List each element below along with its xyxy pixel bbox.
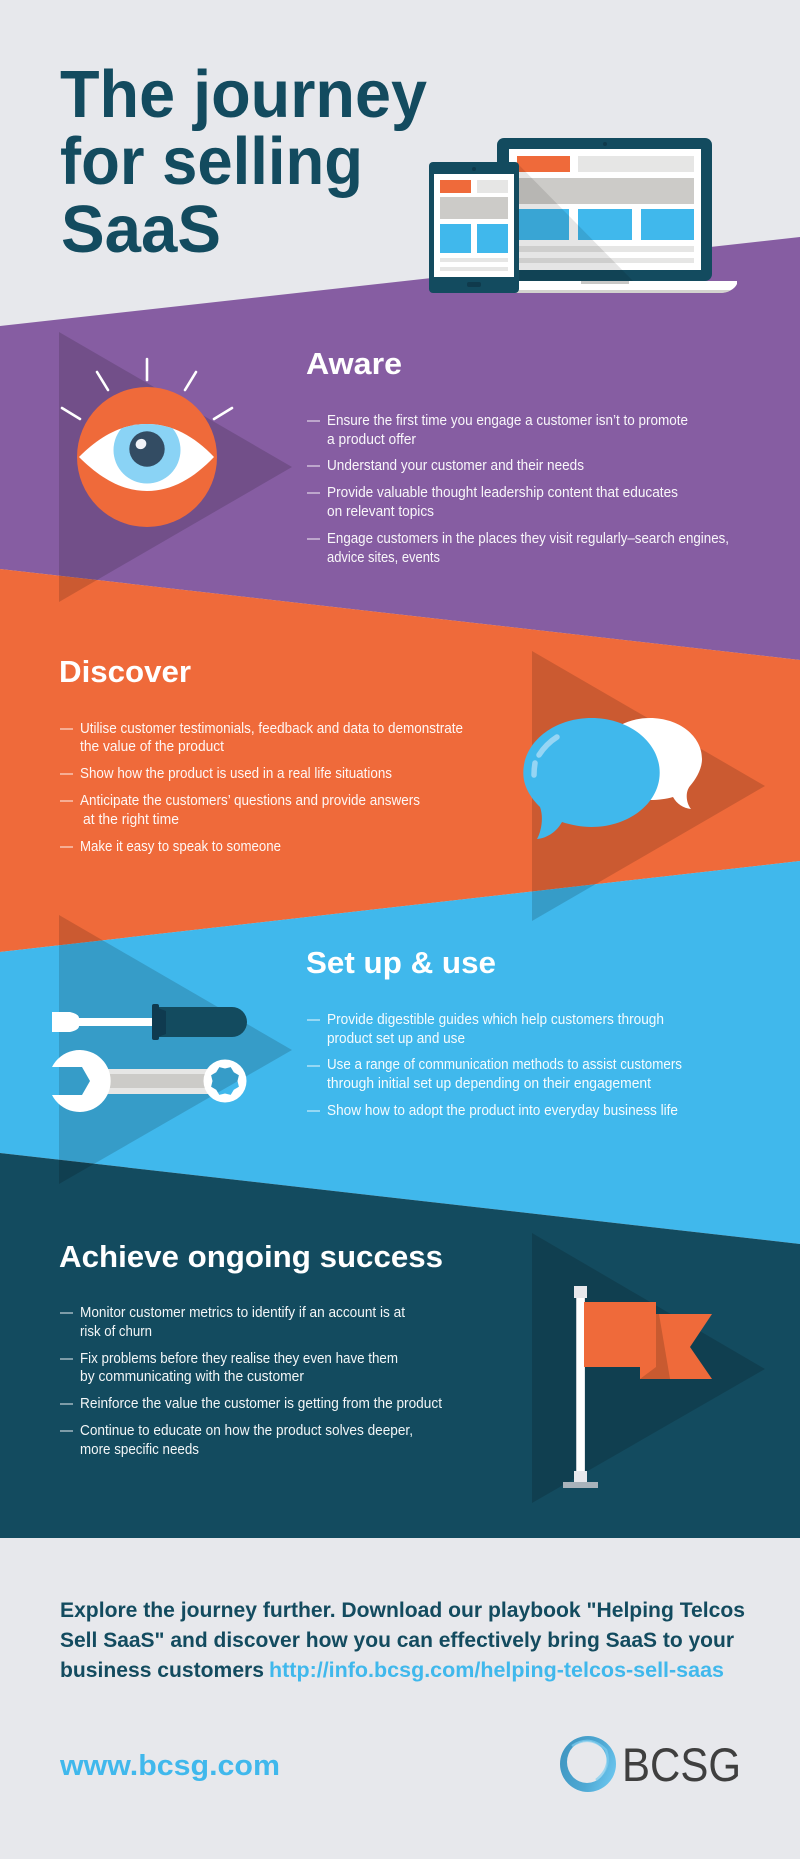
- background band: dark teal: [0, 1153, 800, 1538]
- panel: Set up and use: [52, 915, 682, 1184]
- text block: Achieve list: Monitor customer metrics to identify if an account is at: [80, 1304, 406, 1321]
- panel: Aware: [59, 332, 729, 602]
- title: for selling: [60, 124, 363, 199]
- text block: Aware list: [307, 412, 729, 566]
- call to action text: [60, 1599, 745, 1682]
- text block: Achieve list: [60, 1304, 443, 1458]
- text block: Discover list: [60, 720, 463, 855]
- text block: Achieve list: by communicating with the customer: [80, 1368, 304, 1385]
- text block: Aware list: a product offer: [327, 431, 416, 448]
- triangle: Discover: [532, 651, 765, 921]
- heading: Achieve ongoing success: Achieve ongoing success: [59, 1239, 443, 1274]
- tablet: [429, 162, 519, 293]
- text block: Set up and use list: Show how to adopt the product into everyday business life: [327, 1102, 678, 1119]
- title: [60, 57, 427, 267]
- heading: Aware: Aware: [306, 346, 402, 381]
- call to action text: business customers: [60, 1659, 264, 1682]
- call to action text: Explore the journey further. Download our playbook "Helping Telcos: [60, 1599, 745, 1622]
- laptop screen: [497, 138, 712, 281]
- background band: orange: [0, 569, 800, 952]
- background band: blue: [0, 861, 800, 1244]
- text block: Achieve list: Fix problems before they realise they even have them: [80, 1350, 398, 1367]
- text block: Set up and use list: through initial set up depending on their engagement: [327, 1075, 652, 1092]
- heading: Set up and use: Set up & use: [306, 945, 496, 980]
- text block: Set up and use list: Use a range of communication methods to assist customers: [327, 1056, 682, 1073]
- title: The journey: [60, 57, 427, 132]
- call to action text: http://info.bcsg.com/helping-telcos-sell-saas: [269, 1659, 724, 1682]
- panel: Achieve ongoing success: [59, 1233, 765, 1503]
- text block: Discover list: Show how the product is used in a real life situations: [80, 765, 392, 782]
- text block: Achieve list: more specific needs: [80, 1441, 199, 1458]
- heading: Discover: Discover: [59, 654, 191, 689]
- background band: purple: [0, 237, 800, 660]
- triangle: Achieve ongoing success: [532, 1233, 765, 1503]
- text block: Aware list: on relevant topics: [327, 503, 434, 520]
- text block: Discover list: Make it easy to speak to someone: [80, 838, 281, 855]
- text block: Set up and use list: [307, 1011, 682, 1119]
- text block: Achieve list: Reinforce the value the customer is getting from the product: [80, 1395, 443, 1412]
- text block: Discover list: at the right time: [83, 811, 179, 828]
- text block: Discover list: the value of the product: [80, 738, 225, 755]
- logo: BCSG: [560, 1736, 741, 1792]
- icon: flag: [563, 1286, 712, 1488]
- triangle: Set up and use: [59, 915, 292, 1184]
- text block: Achieve list: Continue to educate on how the product solves deeper,: [80, 1422, 413, 1439]
- panel: Discover: [59, 651, 765, 921]
- text block: Aware list: Understand your customer and their needs: [327, 457, 584, 474]
- icon: speech bubbles: [523, 718, 702, 839]
- icon: wrench: [52, 1050, 246, 1112]
- text block: Discover list: Utilise customer testimonials, feedback and data to demonstrate: [80, 720, 463, 737]
- text block: Set up and use list: product set up and use: [327, 1030, 465, 1047]
- text block: Aware list: Provide valuable thought leadership content that educates: [327, 484, 678, 501]
- text block: Aware list: advice sites, events: [327, 549, 440, 566]
- text block: Discover list: Anticipate the customers’ questions and provide answers: [80, 792, 420, 809]
- icon: screwdriver: [52, 1004, 247, 1040]
- website address: www.bcsg.com: [59, 1750, 280, 1782]
- text block: Set up and use list: Provide digestible guides which help customers through: [327, 1011, 664, 1028]
- icon: laptop and tablet: [429, 138, 737, 293]
- icon: eye: [62, 359, 232, 527]
- laptop base: [500, 281, 737, 293]
- title: SaaS: [61, 192, 221, 267]
- logo: BCSG: BCSG: [622, 1738, 741, 1791]
- text block: Aware list: Engage customers in the places they visit regularly–search engines,: [327, 530, 729, 547]
- triangle: Aware: [59, 332, 292, 602]
- call to action text: Sell SaaS" and discover how you can effectively bring SaaS to your: [60, 1629, 734, 1652]
- text block: Achieve list: risk of churn: [80, 1323, 152, 1340]
- text block: Aware list: Ensure the first time you engage a customer isn’t to promote: [327, 412, 688, 429]
